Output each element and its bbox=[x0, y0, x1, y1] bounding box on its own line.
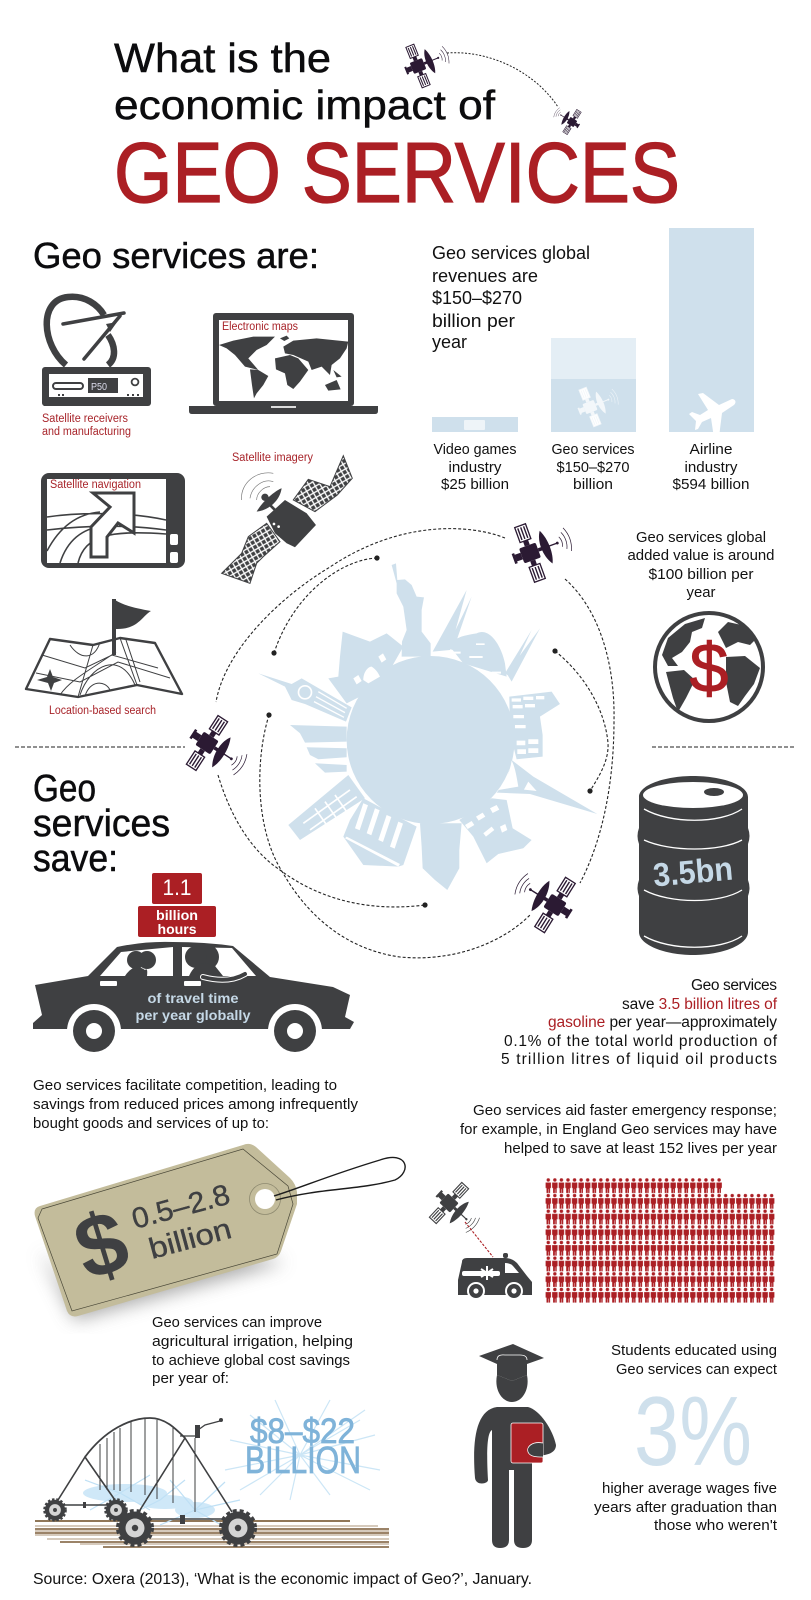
caption: satellite receivers: Satellite receivers bbox=[42, 413, 128, 425]
heading: geo services save: services bbox=[33, 803, 170, 845]
icon: laptop with electronic maps bbox=[189, 313, 378, 414]
icon: car: of travel time bbox=[148, 990, 239, 1006]
text: competition bbox=[33, 1077, 358, 1132]
text: agricultural irrigation: agricultural irrigation, helping bbox=[152, 1333, 353, 1350]
bar labels: $25 billion bbox=[441, 476, 509, 493]
callout: 1.1 billion hours: billion bbox=[156, 907, 198, 923]
bar labels: industry bbox=[684, 459, 738, 476]
icon: satellite receiver bbox=[42, 297, 151, 406]
title: economic impact of bbox=[114, 82, 496, 128]
text: agricultural irrigation: Geo services can improve bbox=[152, 1314, 322, 1331]
caption: satellite imagery: Satellite imagery bbox=[232, 452, 313, 464]
title satellites and orbit bbox=[398, 34, 586, 137]
icon: price tag: billion bbox=[146, 1213, 235, 1266]
icon: price tag bbox=[35, 1144, 405, 1320]
bar chart: revenues bbox=[432, 228, 754, 493]
callout: 1.1 billion hours bbox=[138, 873, 216, 937]
text: competition: Geo services facilitate competition, leading to bbox=[33, 1077, 337, 1094]
icon: car: per year globally bbox=[136, 1007, 251, 1023]
icon: satellite navigation device bbox=[41, 473, 185, 568]
satellite: bottom right bbox=[504, 858, 585, 939]
icon: ambulance with satellite bbox=[422, 1176, 532, 1300]
text: students: higher average wages five bbox=[602, 1480, 777, 1497]
caption: location-based search: Location-based search bbox=[49, 705, 156, 717]
icon: oil barrel bbox=[638, 776, 750, 955]
text: added value: $100 billion per bbox=[648, 566, 754, 583]
text: added value: year bbox=[686, 584, 716, 601]
text: added value bbox=[628, 529, 774, 601]
text: global revenues: revenues are bbox=[432, 266, 538, 286]
icon: price tag: 0.5–2.8 bbox=[129, 1179, 233, 1236]
text: students bbox=[594, 1342, 778, 1534]
text: gasoline savings: Geo services bbox=[691, 977, 777, 994]
heading: geo services save bbox=[33, 768, 170, 880]
text: global revenues: $150–$270 bbox=[432, 288, 522, 308]
text: agricultural irrigation bbox=[152, 1314, 353, 1387]
icon: folded map with flag bbox=[26, 599, 182, 697]
text: emergency response: helped to save at least 152 lives per year bbox=[504, 1140, 777, 1157]
icon: irrigation system bbox=[35, 1418, 389, 1547]
landmark: minarets and dome bbox=[433, 590, 540, 682]
satellite: top right bbox=[504, 511, 580, 586]
landmark: taj mahal bbox=[328, 632, 403, 703]
callout: $8–$22 billion: $8–$22 bbox=[250, 1412, 355, 1451]
heading: geo services save: Geo bbox=[33, 768, 96, 810]
text: gasoline savings bbox=[501, 977, 778, 1068]
text: agricultural irrigation: per year of: bbox=[152, 1370, 229, 1387]
landmark: eiffel tower bbox=[497, 760, 597, 814]
icon: large satellite bbox=[222, 456, 352, 583]
bar labels: billion bbox=[573, 476, 613, 493]
landmark: leaning tower bbox=[509, 692, 560, 759]
text: gasoline savings: save 3.5 billion litres of bbox=[622, 996, 778, 1013]
text: students: years after graduation than bbox=[594, 1499, 777, 1516]
callout: 1.1 billion hours: 1.1 bbox=[162, 875, 192, 900]
text: competition: bought goods and services of up to: bbox=[33, 1115, 269, 1132]
spray bbox=[83, 1475, 240, 1530]
landmark: pagoda bbox=[459, 798, 532, 863]
pictogram: people saved bbox=[545, 1178, 775, 1303]
text: gasoline savings: 5 trillion litres of liquid oil products bbox=[501, 1051, 777, 1068]
caption: satellite receivers: and manufacturing bbox=[42, 426, 131, 438]
text: global revenues: billion per bbox=[432, 311, 515, 331]
icon: globe with dollar bbox=[655, 613, 763, 721]
bar labels: Airline bbox=[690, 441, 732, 458]
landmark: monuments left bbox=[290, 725, 347, 773]
icon: price tag: $ bbox=[63, 1190, 139, 1299]
text: students: Students educated using bbox=[611, 1342, 777, 1359]
bar labels bbox=[434, 441, 750, 493]
stat: 3 percent: 3% bbox=[634, 1376, 752, 1486]
landmark: onion domes bbox=[420, 823, 462, 890]
title: What is the bbox=[114, 35, 331, 81]
icon: satellite receiver: P50 bbox=[91, 382, 107, 393]
heading: geo services are: Geo services are: bbox=[33, 235, 319, 276]
source: Source: Oxera (2013), ‘What is the economic impact of Geo?’, January. bbox=[33, 1571, 532, 1588]
globe with world landmarks bbox=[258, 563, 597, 890]
bar labels: Geo services bbox=[552, 441, 634, 458]
title: GEO SERVICES bbox=[114, 126, 680, 221]
orbit end dots bbox=[266, 555, 593, 908]
icon: laptop with electronic maps: Electronic maps bbox=[222, 321, 298, 333]
bar: airline bbox=[669, 228, 754, 438]
icon: satellite navigation device: Satellite navigation bbox=[50, 479, 141, 491]
text: gasoline savings: gasoline per year—approximately bbox=[548, 1014, 777, 1031]
icon: student bbox=[474, 1344, 556, 1548]
caption: satellite receivers bbox=[42, 413, 131, 438]
text: global revenues bbox=[432, 243, 590, 352]
orbit paths bbox=[216, 529, 614, 958]
text: students: those who weren't bbox=[654, 1517, 778, 1534]
car wheels bbox=[66, 1004, 325, 1059]
landmark: classical temple bbox=[343, 798, 417, 867]
text: added value: added value is around bbox=[628, 547, 774, 564]
text: students: Geo services can expect bbox=[616, 1361, 778, 1378]
text: emergency response bbox=[460, 1102, 777, 1157]
callout: $8–$22 billion bbox=[225, 1400, 380, 1500]
irrigation wheels bbox=[44, 1499, 66, 1521]
callout: 1.1 billion hours: hours bbox=[158, 921, 197, 937]
landmark: statue of liberty bbox=[392, 563, 431, 657]
text: emergency response: Geo services aid faster emergency response; bbox=[473, 1102, 777, 1119]
icon: car bbox=[33, 942, 354, 1059]
satellite: left bbox=[176, 709, 258, 790]
text: global revenues: Geo services global bbox=[432, 243, 590, 263]
bar labels: $150–$270 bbox=[556, 459, 630, 476]
landmark: big ben bbox=[258, 673, 352, 722]
text: emergency response: for example, in England Geo services may have bbox=[460, 1121, 777, 1138]
bar labels: industry bbox=[448, 459, 502, 476]
callout: $8–$22 billion: BILLION bbox=[245, 1440, 361, 1482]
text: global revenues: year bbox=[432, 332, 467, 352]
pivot frame bbox=[58, 1418, 238, 1519]
text: competition: savings from reduced prices among infrequently bbox=[33, 1096, 358, 1113]
icon: oil barrel: 3.5bn bbox=[651, 850, 734, 893]
bar: video games bbox=[432, 417, 518, 432]
icon: globe with dollar: $ bbox=[690, 629, 728, 707]
bar: geo services bbox=[551, 338, 636, 432]
heading: geo services save: save: bbox=[33, 838, 118, 880]
text: gasoline savings: 0.1% of the total world production of bbox=[504, 1033, 778, 1050]
divider right bbox=[652, 746, 796, 748]
text: added value: Geo services global bbox=[636, 529, 766, 546]
soil lines bbox=[35, 1521, 389, 1547]
landmark: office block bbox=[288, 775, 365, 840]
divider left bbox=[15, 746, 185, 748]
bar labels: Video games bbox=[434, 441, 516, 458]
title bbox=[114, 35, 680, 221]
bar labels: $594 billion bbox=[672, 476, 750, 493]
text: agricultural irrigation: to achieve global cost savings bbox=[152, 1352, 350, 1369]
